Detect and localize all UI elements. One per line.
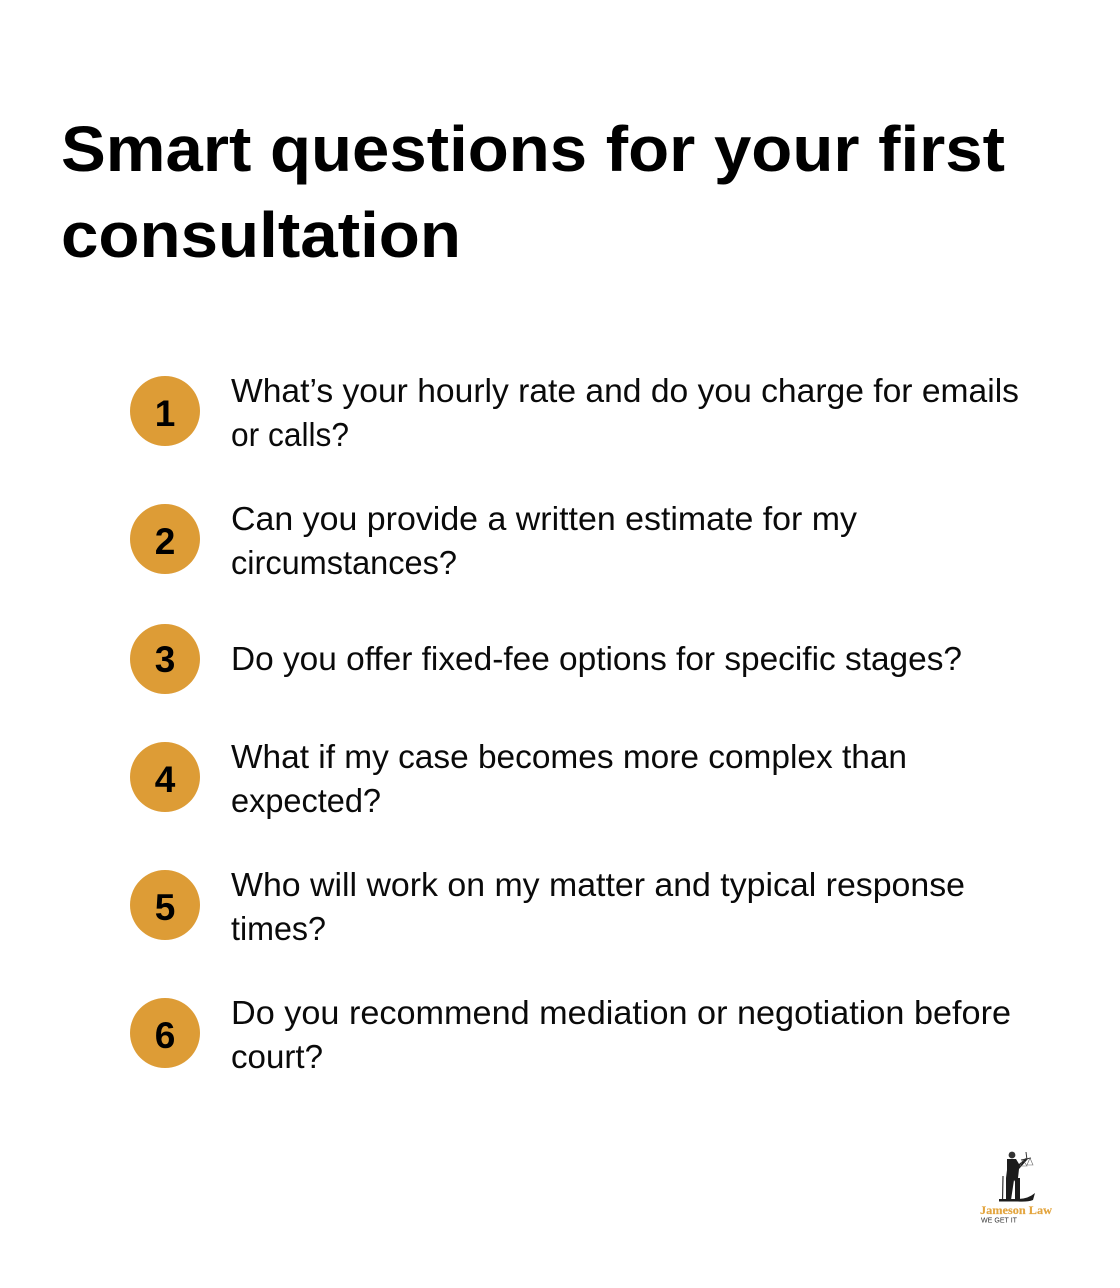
question 2 text: circumstances? [231,544,457,581]
question 6 text: Do you recommend mediation or negotiation before [231,994,1011,1031]
number badge 5: 5 [155,887,175,928]
question 3 [130,624,962,694]
question 4 text: expected? [231,782,381,819]
number badge 6: 6 [155,1015,175,1056]
number badge 4 [130,742,200,812]
question 6 text [231,994,1011,1075]
logo: Jameson Law [980,1152,1052,1224]
number badge 1: 1 [155,393,175,434]
number badge 3: 3 [155,639,175,680]
question 1 [130,372,1019,453]
number badge 2: 2 [155,521,175,562]
question 2 text: Can you provide a written estimate for my [231,500,858,537]
question 5 text: Who will work on my matter and typical response [231,866,965,903]
title: consultation [61,199,461,271]
logo name: Jameson Law [980,1203,1052,1217]
question 6 text: court? [231,1038,323,1075]
question 4 text: What if my case becomes more complex than [231,738,907,775]
title: Smart questions for your first [61,113,1005,185]
question 5 text: times? [231,910,326,947]
question 5 text [231,866,965,947]
number badge 2 [130,504,200,574]
question 4 text [231,738,907,819]
title [61,113,1005,271]
number badge 6 [130,998,200,1068]
question 3 text: Do you offer fixed-fee options for specific stages? [231,640,962,677]
question 1 text [231,372,1019,453]
question 5 [130,866,965,947]
number badge 1 [130,376,200,446]
question 2 text [231,500,858,581]
number badge 3 [130,624,200,694]
number badge 5 [130,870,200,940]
question 6 [130,994,1011,1075]
icon: lady justice [999,1152,1035,1202]
question 2 [130,500,858,581]
list of questions [130,372,1019,1075]
question 1 text: What’s your hourly rate and do you charge for emails [231,372,1019,409]
question 4 [130,738,907,819]
logo tagline: WE GET IT [981,1216,1017,1224]
question 1 text: or calls? [231,416,349,453]
number badge 4: 4 [155,759,176,800]
